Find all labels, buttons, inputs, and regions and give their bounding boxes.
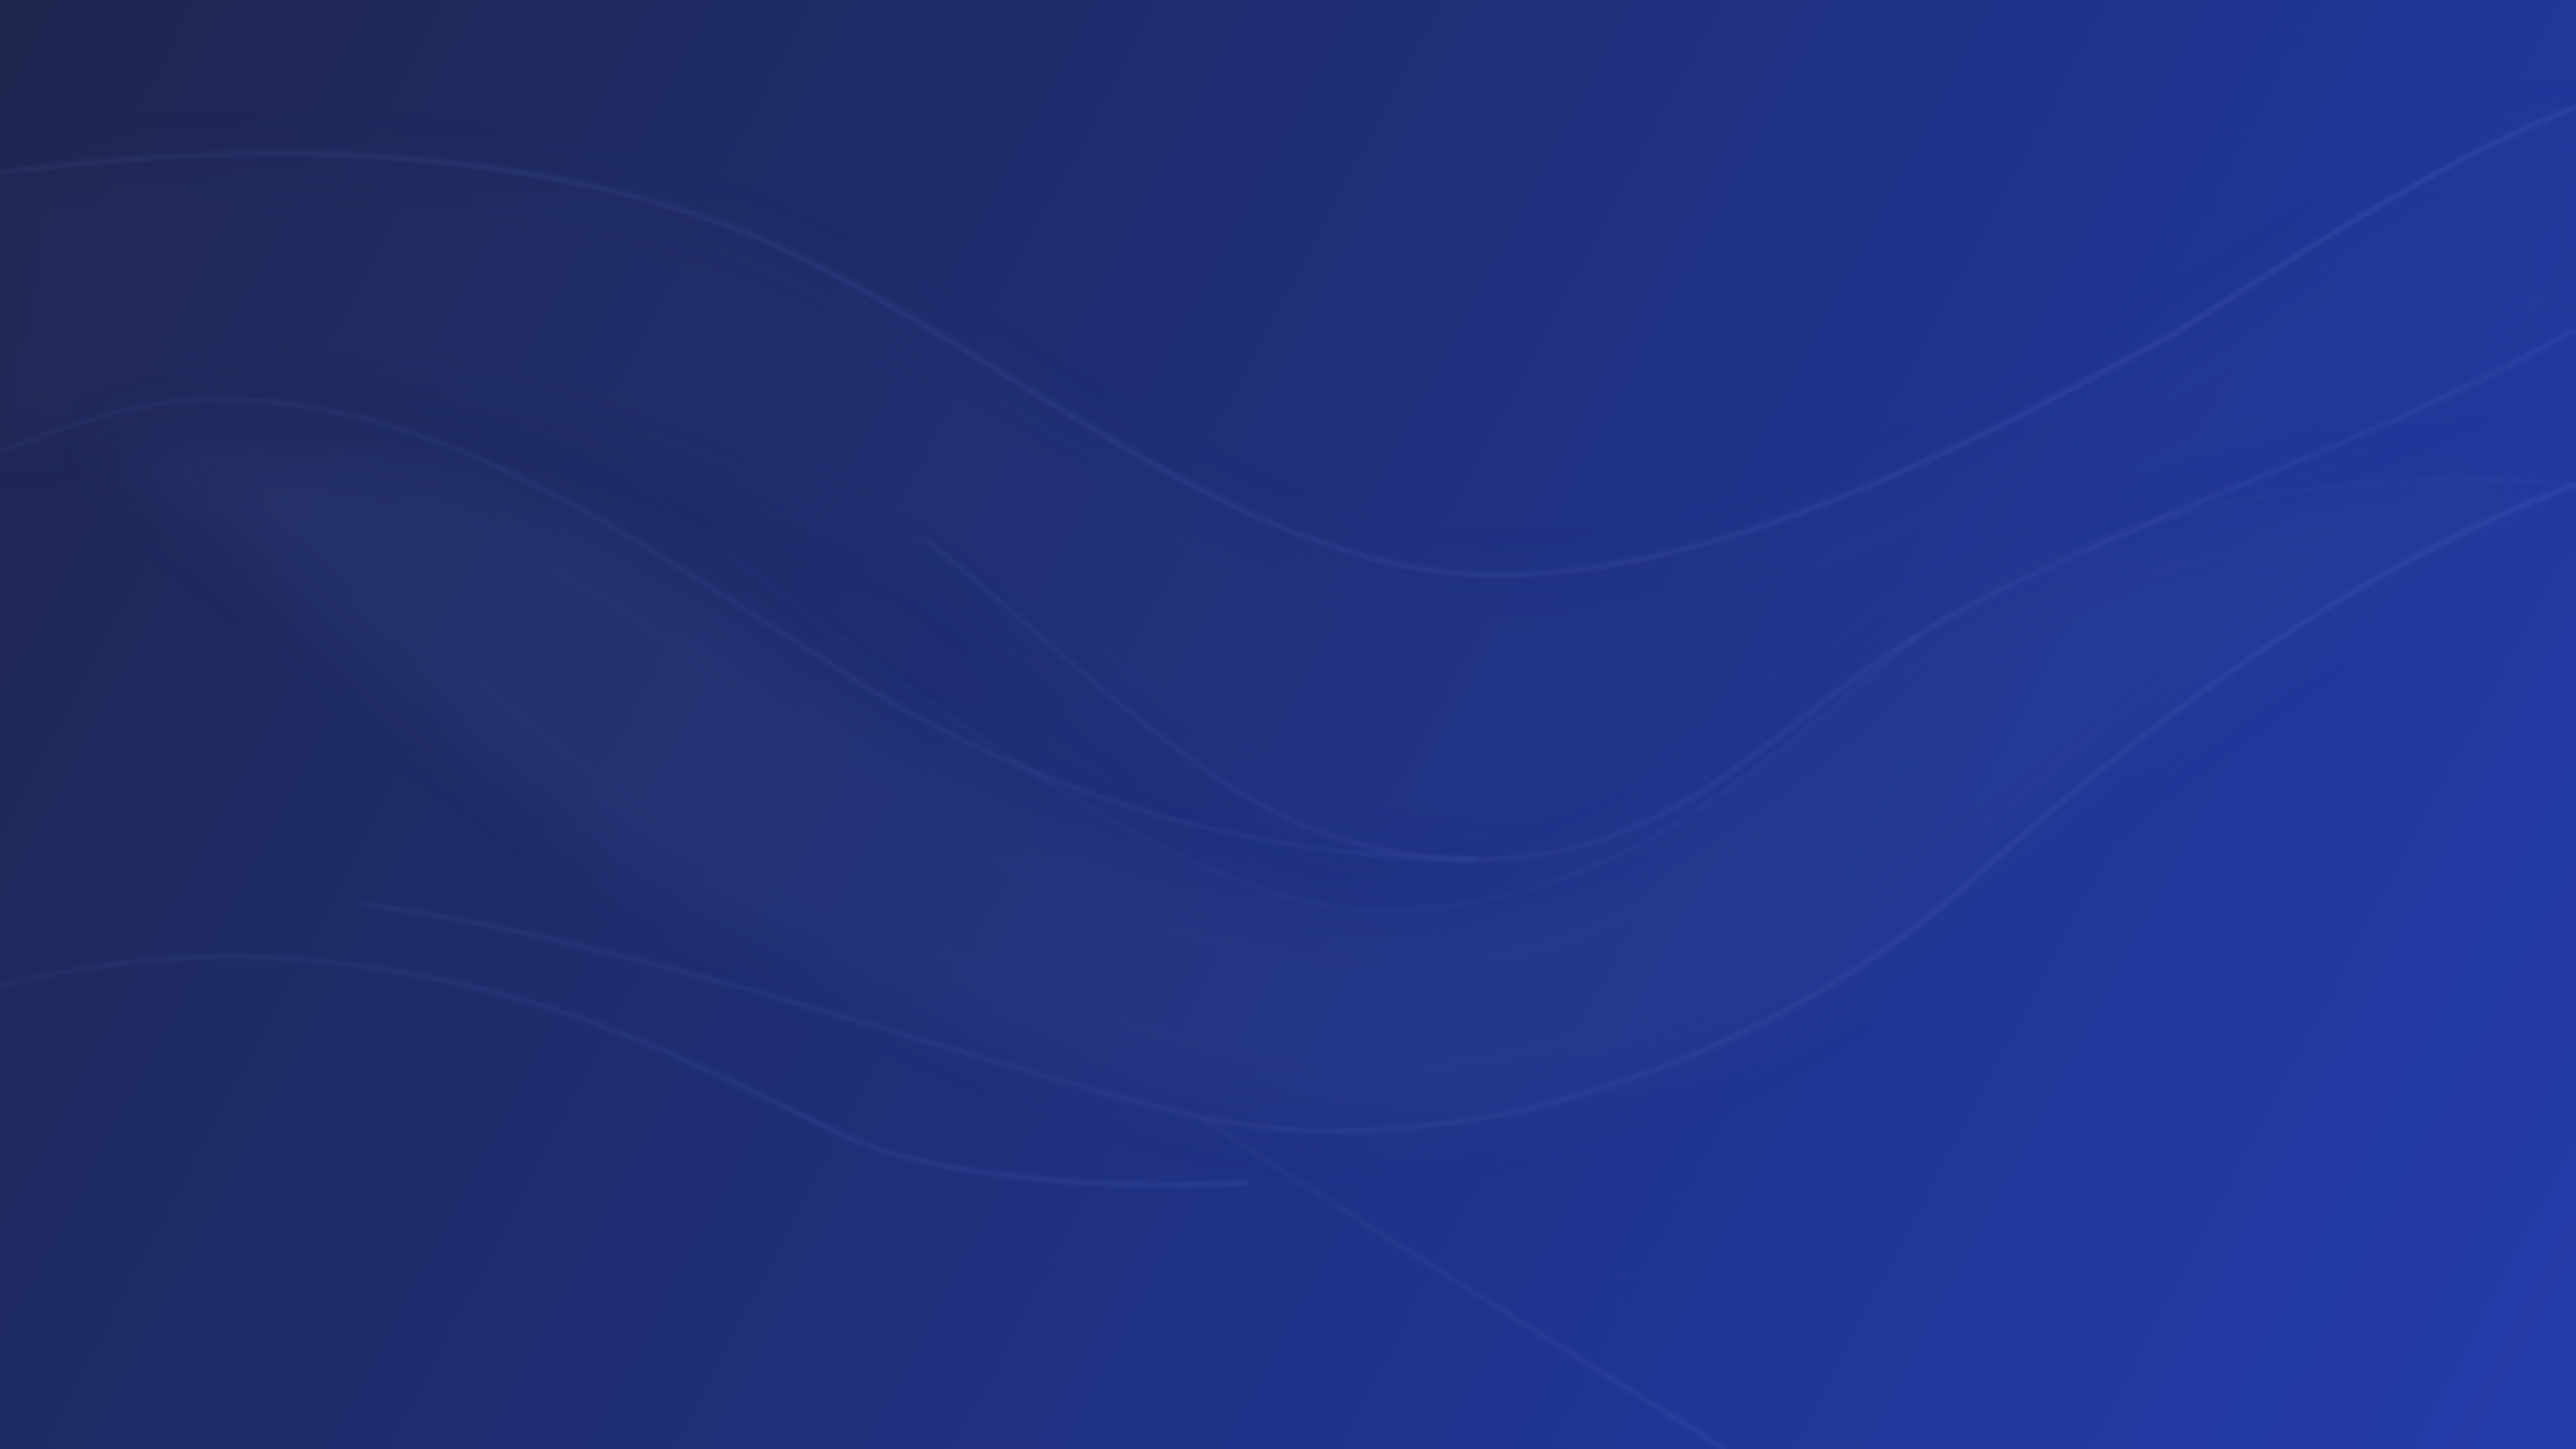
lower contour [362, 484, 2576, 1131]
second contour [0, 329, 2576, 859]
middle wave band [99, 435, 2576, 1126]
top contour [0, 107, 2576, 575]
upper wave band [0, 115, 2576, 854]
lower-left contour [0, 957, 1248, 1185]
faint right contour [1922, 480, 2576, 633]
diagonal contour [1199, 1117, 1725, 1449]
inner contour [920, 534, 1479, 859]
faint inner contour [625, 476, 1922, 912]
